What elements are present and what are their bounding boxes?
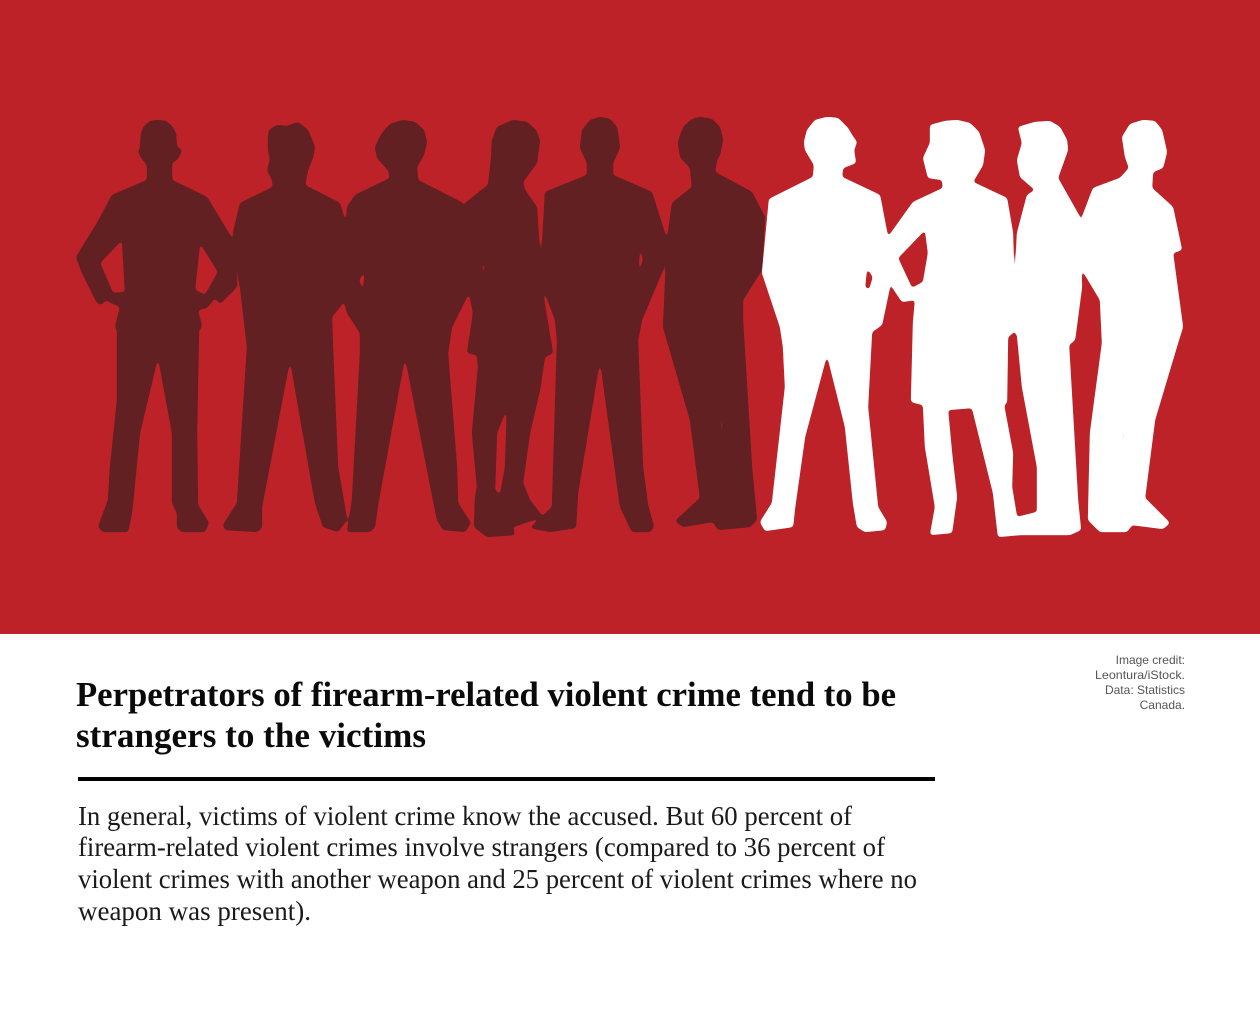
figure 5 [530,117,667,532]
title: strangers to the victims [76,716,426,755]
image credit: Data: Statistics [1105,683,1185,697]
image credit [1095,653,1185,712]
figure 9 [1013,121,1082,535]
title [76,675,896,755]
silhouettes: six dark figures (strangers) [76,117,765,537]
silhouettes: four white figures [760,117,1183,537]
title: Perpetrators of firearm-related violent crime tend to be [76,675,896,714]
figure 3 [343,120,472,532]
figure 1 [76,120,237,532]
figure 8: woman [888,120,1020,537]
figure 2 [223,122,360,532]
body text: firearm-related violent crimes involve strangers (compared to 36 percent of [78,832,885,862]
figure 4: woman [465,120,553,537]
body text: In general, victims of violent crime know the accused. But 60 percent of [78,801,852,831]
body text [78,801,917,926]
figure 6 [663,117,765,530]
red banner panel [0,0,1260,634]
body text: weapon was present). [78,896,311,926]
figure 7 [760,117,890,532]
image credit: Leontura/iStock. [1095,668,1185,682]
image credit: Canada. [1140,698,1185,712]
title rule [78,777,935,781]
body text: violent crimes with another weapon and 25 percent of violent crimes where no [78,864,917,894]
image credit: Image credit: [1116,653,1185,667]
figure 10 [1082,120,1183,532]
